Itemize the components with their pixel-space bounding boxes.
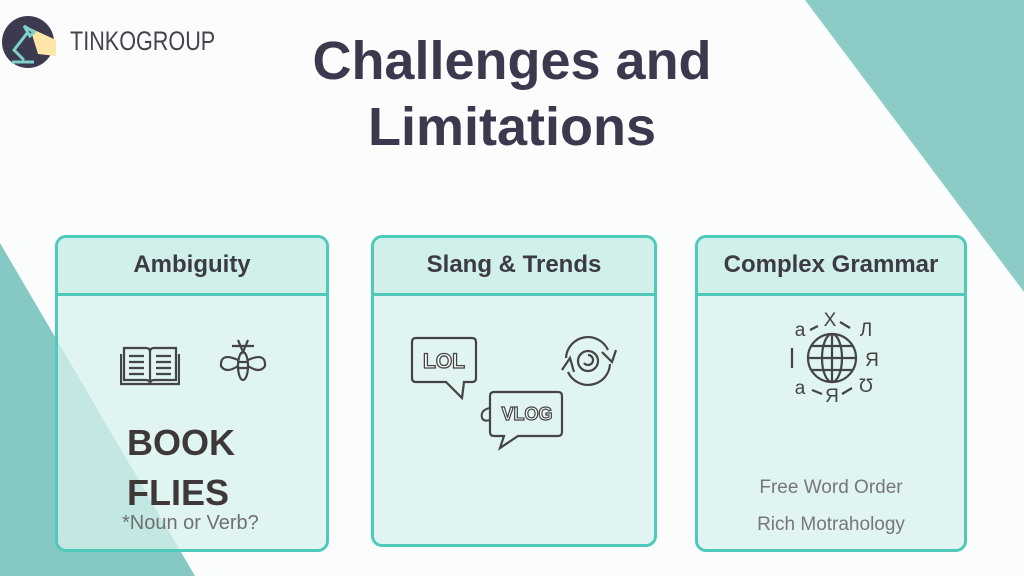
title [312, 31, 712, 157]
text: noun or verb: *Noun or Verb? [122, 512, 259, 534]
logo [2, 16, 215, 68]
icon: VLOG bubble: VLOG [501, 404, 553, 424]
icon: LOL bubble [410, 336, 478, 400]
panel: grammar: Complex Grammar [724, 251, 938, 278]
title: Challenges and [312, 31, 712, 91]
panel: slang: Slang & Trends [427, 251, 601, 278]
icon: globe languages: a [795, 378, 806, 399]
icon: trend cycle [561, 336, 617, 386]
icon: LOL bubble: LOL [423, 350, 465, 373]
icon: globe languages: a [795, 320, 806, 341]
icon: globe languages: Л [860, 320, 872, 341]
text: book flies: BOOK [127, 422, 235, 463]
icon: globe languages [790, 310, 879, 404]
panel: ambiguity [55, 235, 329, 552]
panel: slang [371, 235, 657, 547]
panel: ambiguity: Ambiguity [133, 251, 251, 278]
icon: globe languages: X [824, 310, 837, 331]
panel: grammar [695, 235, 967, 552]
icon: globe languages: Ʊ [859, 376, 873, 397]
icon: globe languages: Я [865, 350, 879, 371]
text: rich morphology: Rich Motrahology [757, 514, 905, 535]
icon: fly [220, 340, 266, 382]
text: book flies [127, 422, 235, 513]
icon: VLOG bubble [480, 390, 564, 451]
text: free word order: Free Word Order [759, 477, 903, 498]
title: Limitations [368, 97, 656, 157]
logo: TINKOGROUP [70, 26, 215, 56]
icon: book [120, 346, 180, 386]
text: book flies: FLIES [127, 472, 229, 513]
